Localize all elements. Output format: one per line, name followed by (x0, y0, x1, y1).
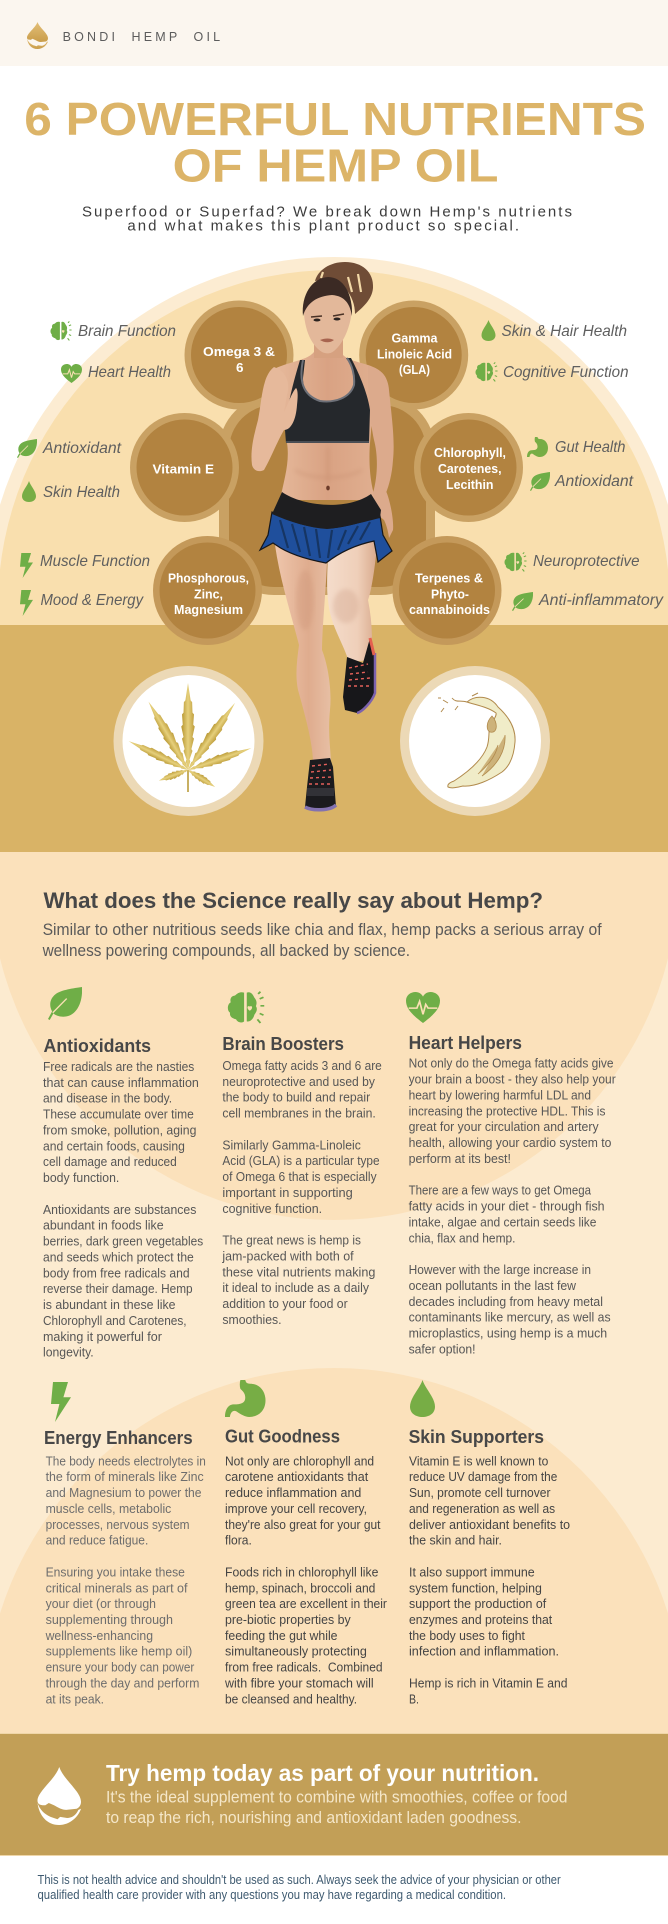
nutrient circle: terpenes: Phyto- (431, 586, 469, 602)
runner figure (251, 262, 394, 811)
disclaimer (38, 1873, 561, 1902)
benefit: heart health: Heart Health (88, 364, 171, 381)
text: gut goodness: improve your cell recovery, (225, 1501, 367, 1516)
text: energy enhancers: through the day and perform (46, 1676, 199, 1690)
text: brain boosters: it ideal to include as a daily (222, 1280, 369, 1295)
text: gut goodness (224, 1453, 388, 1706)
text: energy enhancers (45, 1453, 206, 1706)
text: gut goodness: reduce inflammation and (225, 1485, 361, 1500)
text: antioxidants: and disease in the body. (43, 1091, 172, 1106)
nutrient circle: minerals: Zinc, (194, 586, 223, 602)
benefit labels with icons: right column (476, 320, 664, 611)
head (303, 277, 352, 358)
heading: gut goodness: Gut Goodness (225, 1427, 340, 1447)
sports bra (285, 358, 370, 443)
text: gut goodness: be cleansed and healthy. (225, 1691, 357, 1706)
panel: brain boosters (221, 992, 382, 1327)
text: gut goodness: Not only are chlorophyll and (225, 1453, 374, 1468)
benefit: antioxidant: Antioxidant (554, 473, 634, 490)
nutrient circle: chlorophyll: Carotenes, (438, 461, 502, 476)
nutrient circle: minerals (153, 536, 262, 645)
text: brain boosters: Acid (GLA) is a particular type (222, 1153, 380, 1168)
benefit: neuroprotective (505, 552, 640, 571)
text: heart helpers: Not only do the Omega fatty acids give (409, 1056, 614, 1071)
torso (267, 338, 388, 500)
text: skin supporters: deliver antioxidant benefits to (409, 1517, 570, 1532)
brand name: BONDI HEMP OIL (63, 30, 220, 44)
right arm (368, 366, 394, 538)
central capsule behind runner (219, 395, 435, 595)
text: brain boosters: jam-packed with both of (221, 1248, 354, 1263)
text: antioxidants (43, 1059, 204, 1360)
icon: brain (228, 992, 264, 1023)
text: skin supporters: It also support immune (409, 1564, 535, 1579)
text: antioxidants: Chlorophyll and Carotenes, (43, 1313, 187, 1328)
banner heading: Try hemp today as part of your nutrition. (106, 1760, 539, 1786)
nutrient circle: omega (184, 300, 294, 410)
nutrient circle: gamma linoleic acid: Gamma (392, 330, 438, 346)
text: brain boosters: smoothies. (222, 1312, 282, 1327)
panel: gut goodness (224, 1380, 388, 1706)
nutrient circle: minerals: Phosphorous, (168, 570, 249, 586)
benefit: neuroprotective: Neuroprotective (533, 553, 640, 570)
text: heart helpers: decades including from heavy metal (409, 1294, 603, 1309)
nutrient circle: vitamin E (130, 413, 239, 522)
text: energy enhancers: supplementing through (46, 1612, 173, 1627)
header bar (0, 0, 668, 66)
text: brain boosters: the body to build and repair (222, 1090, 371, 1105)
science heading: What does the Science really say about Hemp? (44, 888, 543, 913)
text: gut goodness: they're also great for your gut (225, 1517, 381, 1532)
text: skin supporters: Hemp is rich in Vitamin E and (409, 1676, 568, 1690)
text: heart helpers: contaminants like mercury, as well as (409, 1310, 611, 1325)
text: brain boosters: of Omega 6 that is especially (222, 1169, 377, 1184)
text: brain boosters: important in supporting (222, 1185, 353, 1200)
text: heart helpers: heart by lowering harmful LDL and (409, 1087, 591, 1102)
panel: heart helpers (406, 992, 616, 1356)
text: antioxidants: These accumulate over time (43, 1107, 194, 1122)
left arm (251, 367, 298, 471)
title (24, 93, 646, 192)
text: antioxidants: cell damage and reduced (43, 1154, 177, 1169)
science intro text: Similar to other nutritious seeds like chia and flax, hemp packs a serious array of (43, 921, 602, 939)
panel: antioxidants (43, 987, 204, 1360)
text: skin supporters: enzymes and proteins that (409, 1612, 553, 1627)
text: antioxidants: is abundant in these like (43, 1297, 176, 1312)
nutrient circle: gamma linoleic acid: (GLA) (399, 362, 430, 377)
nutrient circle: chlorophyll (414, 413, 523, 522)
text: brain boosters: cognitive function. (222, 1201, 322, 1216)
text: antioxidants: and seeds which protect the (43, 1249, 194, 1264)
title: 6 POWERFUL NUTRIENTS (24, 93, 646, 145)
text: heart helpers: However with the large increase in (409, 1262, 591, 1277)
text: antioxidants: and certain foods, causing (43, 1138, 185, 1153)
hero semicircle backdrop (0, 257, 668, 955)
text: energy enhancers: the form of minerals like Zinc (46, 1469, 204, 1484)
text: heart helpers: health, allowing your cardio system to (409, 1135, 611, 1150)
text: skin supporters: support the production of (409, 1596, 547, 1611)
text: antioxidants: body from free radicals and (43, 1265, 190, 1280)
text: brain boosters: Similarly Gamma-Linoleic (222, 1137, 361, 1152)
nutrient circle: chlorophyll: Chlorophyll, (434, 445, 506, 460)
text: gut goodness: carotene antioxidants that (225, 1469, 369, 1484)
text: gut goodness: simultaneously protecting (225, 1644, 367, 1659)
benefit: heart health (61, 364, 171, 383)
text: gut goodness: hemp, spinach, broccoli and (225, 1580, 375, 1595)
benefit: skin and hair health (482, 320, 627, 341)
benefit: mood and energy: Mood & Energy (40, 592, 144, 609)
benefit: brain function (50, 321, 176, 340)
benefit: skin health (22, 481, 120, 502)
text: antioxidants: that can cause inflammation (43, 1075, 199, 1090)
heading: skin supporters: Skin Supporters (409, 1427, 544, 1447)
benefit: mood and energy (20, 590, 144, 616)
icon: drop with hands (38, 1767, 81, 1825)
ponytail (315, 262, 373, 314)
shorts (260, 492, 392, 563)
banner text (106, 1789, 568, 1827)
icon: leaf (48, 987, 82, 1020)
science intro text: wellness powering compounds, all backed by science. (42, 942, 410, 960)
text: antioxidants: from smoke, pollution, aging (43, 1122, 196, 1138)
text: energy enhancers: supplements like hemp oil) (46, 1644, 192, 1659)
nutrient circle: vitamin E: Vitamin E (152, 462, 214, 476)
nutrient circle: gamma linoleic acid (359, 300, 468, 410)
text: skin supporters: infection and inflammation. (409, 1644, 559, 1659)
text: heart helpers (409, 1056, 616, 1356)
text: brain boosters: Omega fatty acids 3 and 6 are (222, 1058, 382, 1073)
image: hemp leaf in circle (114, 666, 264, 816)
legs (275, 535, 378, 760)
benefit: cognitive function: Cognitive Function (503, 364, 629, 381)
nutrient circle: minerals: Magnesium (174, 602, 243, 617)
text: skin supporters: the body uses to fight (409, 1628, 525, 1643)
text: gut goodness: feeding the gut while (225, 1628, 338, 1643)
image: oil splash in circle (400, 666, 550, 816)
text: heart helpers: microplastics, using hemp is a much (409, 1326, 607, 1340)
text: gut goodness: from free radicals. Combined (225, 1660, 383, 1675)
text: skin supporters: reduce UV damage from the (409, 1469, 557, 1484)
nutrient circle: terpenes: Terpenes & (415, 570, 483, 586)
text: gut goodness: pre-biotic properties by (225, 1612, 351, 1627)
benefit: antioxidant (530, 472, 634, 491)
text: gut goodness: with fibre your stomach will (224, 1676, 374, 1690)
nutrient circle: terpenes (392, 536, 502, 645)
panel: energy enhancers (44, 1382, 206, 1706)
icon: stomach (225, 1380, 266, 1417)
subtitle: Superfood or Superfad? We break down Hemp's nutrients (82, 204, 572, 221)
heading: antioxidants: Antioxidants (44, 1036, 151, 1056)
heading: heart helpers: Heart Helpers (409, 1033, 522, 1053)
nutrient circle: terpenes: cannabinoids (409, 602, 490, 617)
text: antioxidants: making it powerful for (43, 1329, 163, 1344)
text: skin supporters (409, 1453, 570, 1706)
icon: heart (406, 992, 440, 1023)
text: brain boosters (221, 1058, 382, 1327)
text: energy enhancers: at its peak. (46, 1691, 104, 1706)
subtitle: and what makes this plant product so special. (127, 218, 519, 235)
text: energy enhancers: Ensuring you intake these (46, 1564, 185, 1579)
icon: logo drop (27, 22, 48, 49)
text: heart helpers: your brain a boost - they also help your (409, 1072, 616, 1087)
subtitle (82, 204, 572, 235)
gold band (0, 625, 668, 852)
icon: drop (410, 1380, 435, 1417)
text: energy enhancers: critical minerals as part of (46, 1580, 188, 1595)
nutrient circle: omega: 6 (236, 360, 244, 375)
text: brain boosters: The great news is hemp is (222, 1233, 361, 1248)
text: gut goodness: flora. (225, 1533, 252, 1548)
landing shoe (305, 758, 336, 811)
text: antioxidants: longevity. (43, 1345, 94, 1360)
text: brain boosters: cell membranes in the brain. (222, 1106, 376, 1121)
text: heart helpers: perform at its best! (409, 1151, 511, 1166)
nutrient circle: gamma linoleic acid: Linoleic Acid (377, 346, 452, 362)
text: energy enhancers: wellness-enhancing (45, 1628, 153, 1643)
text: energy enhancers: The body needs electrolytes in (46, 1453, 206, 1468)
text: heart helpers: intake, algae and certain seeds like (409, 1214, 596, 1229)
disclaimer: This is not health advice and shouldn't be used as such. Always seek the advice of your physician or other (38, 1873, 561, 1887)
benefit: brain function: Brain Function (78, 323, 176, 340)
text: skin supporters: and regeneration as well as (409, 1501, 556, 1516)
text: antioxidants: Antioxidants are substances (43, 1202, 197, 1217)
banner text: to reap the rich, nourishing and antioxidant laden goodness. (106, 1809, 522, 1827)
text: gut goodness: Foods rich in chlorophyll like (225, 1564, 378, 1579)
text: energy enhancers: and Magnesium to power the (46, 1485, 201, 1500)
text: heart helpers: chia, flax and hemp. (409, 1230, 516, 1245)
benefit: skin and hair health: Skin & Hair Health (502, 323, 627, 340)
raised shoe (343, 638, 375, 713)
benefit: skin health: Skin Health (43, 484, 120, 501)
text: antioxidants: berries, dark green vegetables (43, 1234, 204, 1249)
text: heart helpers: There are a few ways to get Omega (409, 1183, 592, 1198)
text: energy enhancers: ensure your body can power (46, 1660, 195, 1675)
nutrient circle: chlorophyll: Lecithin (446, 477, 494, 492)
text: antioxidants: Free radicals are the nasties (43, 1059, 195, 1074)
benefit: gut health: Gut Health (555, 439, 626, 456)
science section background (0, 852, 668, 1733)
benefit labels with icons: left column (17, 321, 176, 616)
text: skin supporters: the skin and hair. (409, 1533, 502, 1548)
text: heart helpers: great for your circulation and artery (409, 1119, 599, 1134)
nutrient circle: omega: Omega 3 & (203, 344, 275, 359)
science intro text (42, 921, 602, 960)
text: heart helpers: ocean pollutants in the last few (409, 1278, 577, 1293)
benefit: gut health (527, 437, 626, 457)
text: antioxidants: abundant in foods like (43, 1218, 164, 1233)
text: energy enhancers: muscle cells, metabolic (46, 1501, 172, 1516)
text: skin supporters: Vitamin E is well known to (409, 1453, 548, 1468)
text: brain boosters: addition to your food or (222, 1296, 348, 1311)
banner text: It's the ideal supplement to combine with smoothies, coffee or food (106, 1789, 568, 1807)
text: antioxidants: reverse their damage. Hemp (43, 1281, 193, 1296)
text: brain boosters: these vital nutrients making (222, 1264, 375, 1279)
text: skin supporters: system function, helping (409, 1580, 542, 1595)
title: OF HEMP OIL (173, 140, 498, 192)
text: gut goodness: green tea are excellent in their (225, 1596, 388, 1611)
benefit: muscle function (20, 553, 150, 578)
text: heart helpers: fatty acids in your diet - through fish (409, 1198, 605, 1214)
text: antioxidants: body function. (43, 1170, 119, 1185)
text: heart helpers: increasing the protective HDL. This is (409, 1103, 606, 1118)
heading: energy enhancers: Energy Enhancers (44, 1428, 193, 1448)
text: skin supporters: Sun, promote cell turnover (409, 1485, 551, 1500)
benefit: antioxidant: Antioxidant (42, 440, 122, 457)
benefit: anti-inflammatory: Anti-inflammatory (538, 592, 664, 609)
benefit: antioxidant (17, 439, 122, 458)
text: brain boosters: neuroprotective and used by (222, 1074, 375, 1089)
text: energy enhancers: your diet (or through (46, 1596, 156, 1611)
text: energy enhancers: and reduce fatigue. (46, 1533, 148, 1548)
call to action banner (0, 1733, 668, 1856)
disclaimer: qualified health care provider with any questions you may have regarding a medical condition. (38, 1888, 506, 1902)
text: energy enhancers: processes, nervous system (46, 1517, 190, 1532)
panel: skin supporters (409, 1380, 570, 1706)
text: skin supporters: B. (409, 1691, 419, 1706)
text: heart helpers: safer option! (409, 1341, 476, 1356)
icon: lightning bolt (51, 1382, 71, 1422)
heading: brain boosters: Brain Boosters (222, 1034, 344, 1054)
benefit: muscle function: Muscle Function (40, 553, 150, 570)
